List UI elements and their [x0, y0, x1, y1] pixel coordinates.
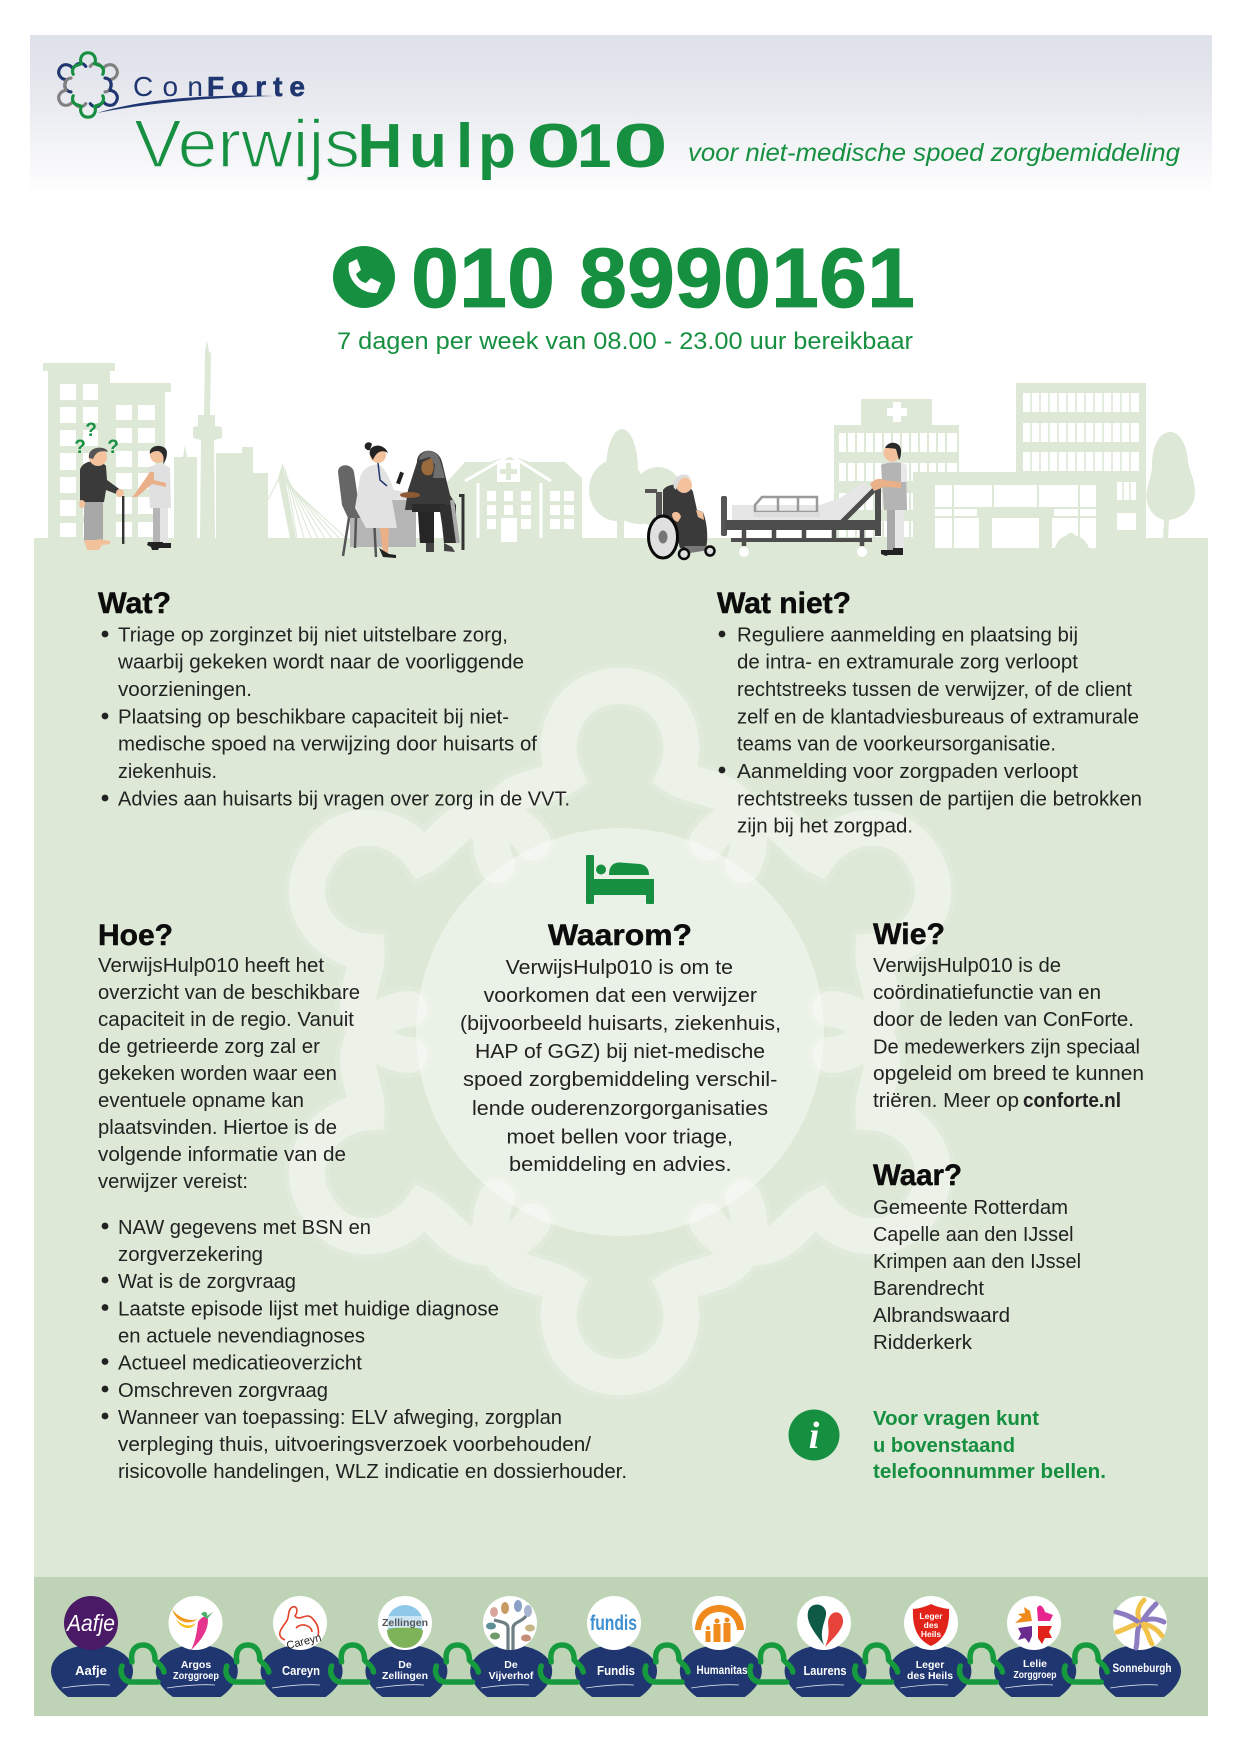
text block: Wat?: [98, 587, 570, 810]
member: Humanitas: [692, 1596, 748, 1677]
text block: Waar?: Gemeente Rotterdam: [873, 1196, 1068, 1219]
raised back rail: [840, 490, 874, 524]
text block: Wat niet?: Aanmelding voor zorgpaden verloopt: [737, 760, 1078, 783]
big hospital: [834, 399, 959, 540]
required information list: NAW gegevens met BSN en: [118, 1216, 371, 1239]
chair: [338, 465, 377, 518]
emblem centre disc: [416, 828, 824, 1236]
text block: Hoe?: gekeken worden waar een: [98, 1062, 337, 1085]
required information list: en actuele nevendiagnoses: [118, 1324, 365, 1348]
emblem rings: [251, 686, 989, 1377]
member: De Vijverhof: [483, 1596, 537, 1682]
text block: Waar?: Barendrecht: [873, 1277, 984, 1300]
member: Aafje: Aafje: [75, 1663, 107, 1678]
text block: Wie?: VerwijsHulp010 is de: [873, 954, 1061, 977]
member: Leger des Heils: des: [924, 1620, 939, 1630]
text block: Hoe?: de getrieerde zorg zal er: [98, 1035, 320, 1058]
member: Careyn: Careyn: [282, 1663, 320, 1678]
header band: [30, 35, 1212, 197]
member: De Zellingen: Zellingen: [382, 1617, 428, 1629]
text block: Wat?: Wat?: [98, 587, 171, 620]
member: Lelie Zorggroep: Zorggroep: [1014, 1669, 1056, 1681]
member: Laurens: Laurens: [804, 1663, 846, 1678]
member: Argos Zorggroep: [168, 1596, 222, 1682]
text block: Wat?: Plaatsing op beschikbare capaciteit bij niet-: [118, 705, 509, 728]
patient: [405, 451, 456, 543]
big wheel: [648, 516, 678, 558]
nurse: [132, 446, 171, 550]
Erasmus bridge: [268, 462, 346, 538]
member: Leger des Heils: Leger: [916, 1659, 944, 1671]
bed frame: [725, 520, 875, 530]
office building right: [1016, 383, 1146, 540]
text block: Hoe?: [98, 919, 627, 1483]
illustration: elderly woman in wheelchair: [645, 474, 714, 559]
emblem ring halo: [251, 686, 989, 1377]
member: Leger des Heils: Heils: [921, 1629, 941, 1639]
table: [350, 499, 416, 547]
member: Careyn: [273, 1596, 327, 1678]
icon: info: [788, 1410, 840, 1460]
text block: Wie?: opgeleid om breed te kunnen: [873, 1062, 1144, 1085]
side rail: [755, 497, 817, 512]
member: Leger des Heils: des Heils: [907, 1670, 953, 1682]
required information list: Wat is de zorgvraag: [118, 1270, 296, 1293]
member: Sonneburgh: [1112, 1596, 1172, 1675]
text block: Waarom?: moet bellen voor triage,: [506, 1126, 733, 1148]
question marks: ?: [107, 437, 119, 458]
illustration: hospital bed with nurse: [721, 443, 907, 557]
wheelchair frame: [645, 489, 662, 517]
text block: Wat niet?: rechtstreeks tussen de partijen die betrokken: [737, 787, 1142, 810]
elderly man: [79, 448, 124, 550]
text block: Waar?: Ridderkerk: [873, 1331, 973, 1354]
icon: info: i: [809, 1415, 820, 1457]
text block: Hoe?: volgende informatie van de: [98, 1143, 346, 1166]
subtitle: voor niet-medische spoed zorgbemiddeling: [688, 139, 1180, 167]
title: [134, 106, 668, 182]
member: Fundis: [587, 1596, 641, 1678]
title: Verwijs: [134, 106, 360, 182]
text block: Wie?: De medewerkers zijn speciaal: [873, 1036, 1140, 1058]
member: De Zellingen: [378, 1596, 432, 1682]
text block: Wat?: waarbij gekeken wordt naar de voorliggende: [117, 651, 524, 674]
member: Aafje: Aafje: [65, 1610, 115, 1636]
question marks: [74, 420, 119, 458]
member: De Vijverhof: De: [504, 1659, 518, 1671]
required information list: risicovolle handelingen, WLZ indicatie en dossierhouder.: [118, 1460, 627, 1483]
title: 0: [613, 112, 668, 181]
member: Aafje: [64, 1596, 118, 1678]
headboard: [721, 496, 727, 536]
phone number: 010 8990161: [411, 231, 915, 325]
required information list: [102, 1216, 627, 1483]
title: 1: [577, 112, 611, 181]
text block: Hoe?: Hoe?: [98, 919, 173, 952]
text block: Wie?: triëren. Meer op: [873, 1089, 1019, 1112]
text block: Waarom?: Waarom?: [548, 919, 692, 952]
mattress: [732, 482, 873, 522]
text block: Waarom?: HAP of GGZ) bij niet-medische: [475, 1040, 765, 1063]
skyline silhouette: [43, 340, 1195, 548]
text block: Wie?: conforte.nl: [1023, 1089, 1121, 1112]
text block: Wat niet?: teams van de voorkeursorganisatie.: [737, 733, 1056, 756]
text block: Wat?: ziekenhuis.: [118, 760, 217, 783]
callout: questions: [873, 1407, 1106, 1483]
required information list: Omschreven zorgvraag: [118, 1379, 328, 1402]
member: Argos Zorggroep: Zorggroep: [173, 1670, 219, 1682]
text block: Wie?: Wie?: [873, 918, 945, 951]
text block: Hoe?: VerwijsHulp010 heeft het: [98, 954, 324, 977]
member: Lelie Zorggroep: Lelie: [1023, 1658, 1047, 1670]
member: De Zellingen: Zellingen: [382, 1670, 428, 1682]
logo mark: [52, 53, 124, 117]
title: Hulp: [358, 112, 516, 181]
question marks: ?: [85, 420, 97, 441]
text block: Waar?: Krimpen aan den IJssel: [873, 1250, 1081, 1273]
text block: Wat niet?: Wat niet?: [717, 587, 851, 620]
text block: Waar?: Waar?: [873, 1159, 962, 1192]
text block: Hoe?: verwijzer vereist:: [98, 1170, 248, 1193]
member: Fundis: Fundis: [597, 1663, 635, 1678]
footrest: [684, 546, 709, 553]
doctor: [380, 528, 389, 554]
node underline swooshes: [62, 1685, 1158, 1688]
title: 0: [526, 112, 581, 181]
text block: Wat niet?: Reguliere aanmelding en plaatsing bij: [737, 623, 1078, 646]
text block: Waarom?: VerwijsHulp010 is om te: [506, 956, 733, 979]
member: Laurens: [797, 1596, 851, 1678]
callout: questions: Voor vragen kunt: [873, 1407, 1039, 1430]
building left: [43, 363, 171, 540]
text block: Hoe?: overzicht van de beschikbare: [98, 981, 360, 1004]
text block: Wat?: Triage op zorginzet bij niet uitstelbare zorg,: [118, 623, 508, 646]
panel: member organisations band: [34, 1577, 1208, 1716]
member: Leger des Heils: Leger: [919, 1611, 943, 1621]
text block: Wat?: medische spoed na verwijzing door huisarts of: [118, 733, 537, 756]
text block: Waar?: [873, 1159, 1081, 1354]
text block: Wat niet?: zijn bij het zorgpad.: [737, 814, 913, 838]
text block: Wie?: door de leden van ConForte.: [873, 1008, 1134, 1031]
castors: [739, 547, 749, 557]
text block: Wat niet?: [717, 587, 1142, 838]
patient body: [663, 484, 707, 548]
member: De Zellingen: De: [398, 1659, 412, 1671]
text block: Waarom?: (bijvoorbeeld huisarts, ziekenhuis,: [460, 1012, 781, 1035]
text block: Waar?: Albrandswaard: [873, 1304, 1010, 1327]
text block: Hoe?: eventuele opname kan: [98, 1089, 304, 1112]
text block: Wat niet?: zelf en de klantadviesbureaus of extramurale: [737, 705, 1139, 728]
text block: Wat?: voorzieningen.: [118, 678, 252, 701]
text block: Waarom?: lende ouderenzorgorganisaties: [472, 1097, 768, 1120]
text block: Waarom?: voorkomen dat een verwijzer: [484, 984, 757, 1007]
illustration: confused elderly man with nurse: [74, 420, 171, 550]
icon: phone: [333, 246, 395, 308]
text block: Wat niet?: de intra- en extramurale zorg verloopt: [737, 651, 1078, 674]
small hospital: [447, 455, 582, 542]
chain links between members: [121, 1645, 1107, 1682]
Euromast tower and city: [174, 340, 268, 540]
member: Careyn: Careyn: [285, 1632, 323, 1652]
text block: Wie?: coördinatiefunctie van en: [873, 981, 1101, 1004]
ConForte logo: Forte: [207, 71, 305, 102]
callout: questions: u bovenstaand: [873, 1434, 1015, 1457]
question marks: ?: [74, 437, 86, 458]
text block: Waarom?: bemiddeling en advies.: [509, 1153, 732, 1176]
watermark: ConForte emblem: [251, 686, 989, 1377]
text block: Waar?: Capelle aan den IJssel: [873, 1223, 1074, 1246]
text block: Wat?: Advies aan huisarts bij vragen over zorg in de VVT.: [118, 787, 570, 810]
member: Lelie Zorggroep: [1007, 1596, 1061, 1681]
callout: questions: telefoonnummer bellen.: [873, 1460, 1106, 1483]
ConForte logo: [52, 53, 305, 117]
required information list: Wanneer van toepassing: ELV afweging, zorgplan: [118, 1406, 562, 1429]
required information list: zorgverzekering: [118, 1243, 263, 1266]
tree right: [1146, 432, 1195, 538]
text block: Waarom?: [460, 919, 781, 1176]
text block: Waarom?: spoed zorgbemiddeling verschil-: [463, 1068, 778, 1091]
text block: Wie?: [873, 918, 1144, 1112]
nurse pushing bed: [870, 443, 907, 556]
panel: main green background: [34, 538, 1208, 1578]
cane: [459, 494, 464, 550]
member: Fundis: fundis: [590, 1612, 637, 1635]
required information list: Laatste episode lijst met huidige diagnose: [118, 1298, 499, 1320]
text block: Wat niet?: rechtstreeks tussen de verwijzer, of de client: [737, 678, 1132, 701]
small wheels: [679, 549, 689, 559]
availability line: 7 dagen per week van 08.00 - 23.00 uur bereikbaar: [337, 328, 913, 355]
logo wordmark: Con: [133, 71, 203, 102]
required information list: verpleging thuis, uitvoeringsverzoek voorbehouden/: [118, 1433, 591, 1456]
member: Leger des Heils: [904, 1596, 958, 1682]
illustration: doctor and patient at table: [338, 442, 464, 558]
member: Argos Zorggroep: Argos: [181, 1659, 211, 1671]
member node bases: [51, 1645, 1181, 1697]
text block: Hoe?: capaciteit in de regio. Vanuit: [98, 1008, 354, 1031]
logo swoosh: [97, 96, 275, 113]
required information list: Actueel medicatieoverzicht: [118, 1352, 362, 1374]
member: Humanitas: Humanitas: [696, 1665, 748, 1677]
icon: bed: [586, 855, 654, 904]
text block: Hoe?: plaatsvinden. Hiertoe is de: [98, 1116, 337, 1139]
low building: [913, 472, 1136, 548]
member: De Vijverhof: Vijverhof: [489, 1670, 534, 1682]
member: Sonneburgh: Sonneburgh: [1112, 1661, 1172, 1675]
tree middle: [589, 429, 684, 540]
